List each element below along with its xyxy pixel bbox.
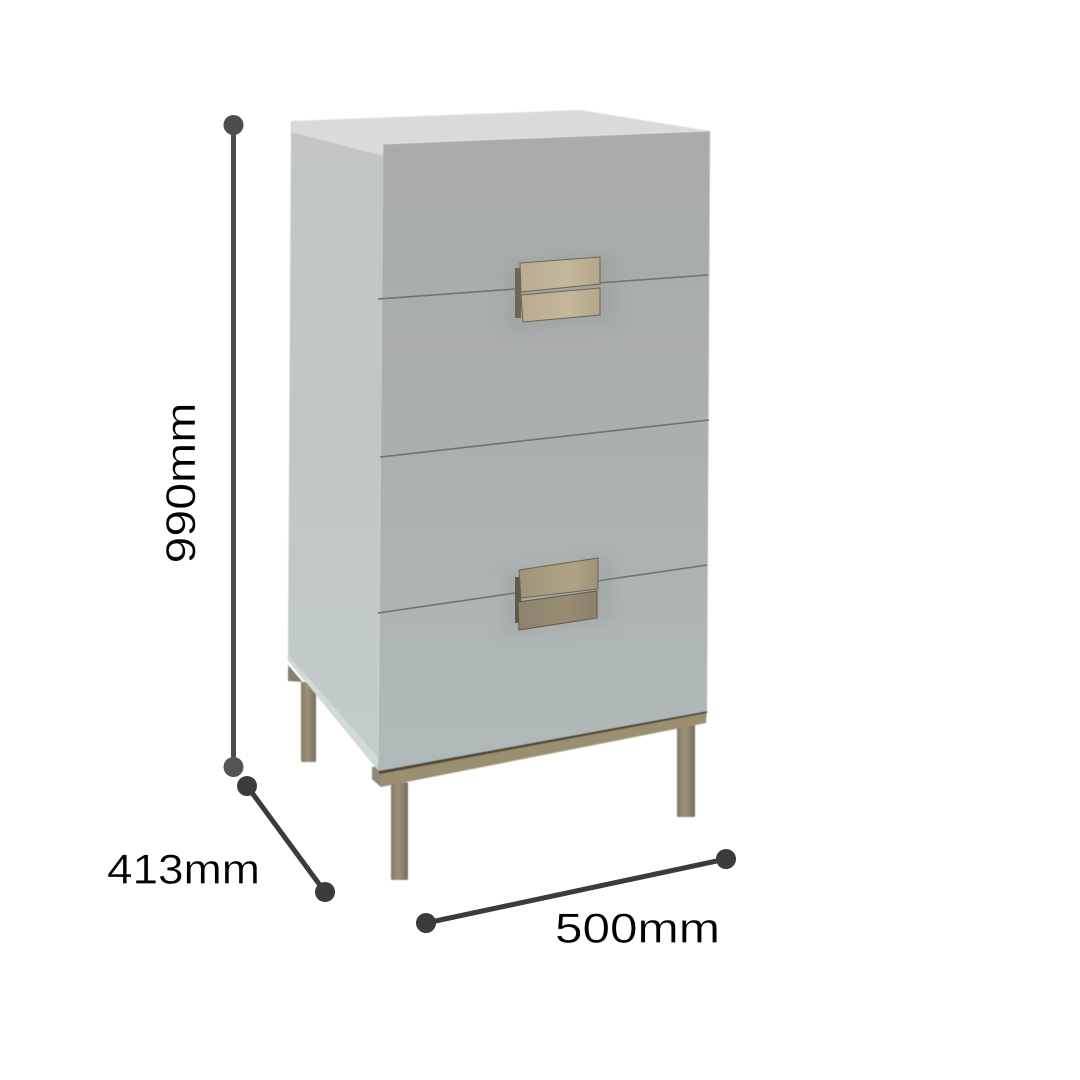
front left leg: [391, 782, 408, 880]
cabinet top: [291, 110, 710, 156]
right leg: [677, 722, 695, 817]
dimension: height: [157, 115, 244, 777]
back left leg: [288, 665, 316, 762]
base rail: [372, 710, 707, 787]
drawer lines: [378, 275, 709, 613]
dimension: width: [416, 849, 736, 952]
label: 413mm: 413mm: [107, 846, 260, 892]
cabinet bottom edge highlight: [288, 655, 378, 770]
cabinet side: [288, 122, 383, 770]
lower handle: [504, 556, 614, 634]
dimension: depth: [107, 776, 335, 902]
chest of drawers: [288, 110, 710, 880]
label: 500mm: 500mm: [555, 904, 720, 952]
cabinet front: [378, 131, 710, 771]
upper handle: [506, 252, 616, 330]
label: 990mm: 990mm: [157, 403, 204, 564]
